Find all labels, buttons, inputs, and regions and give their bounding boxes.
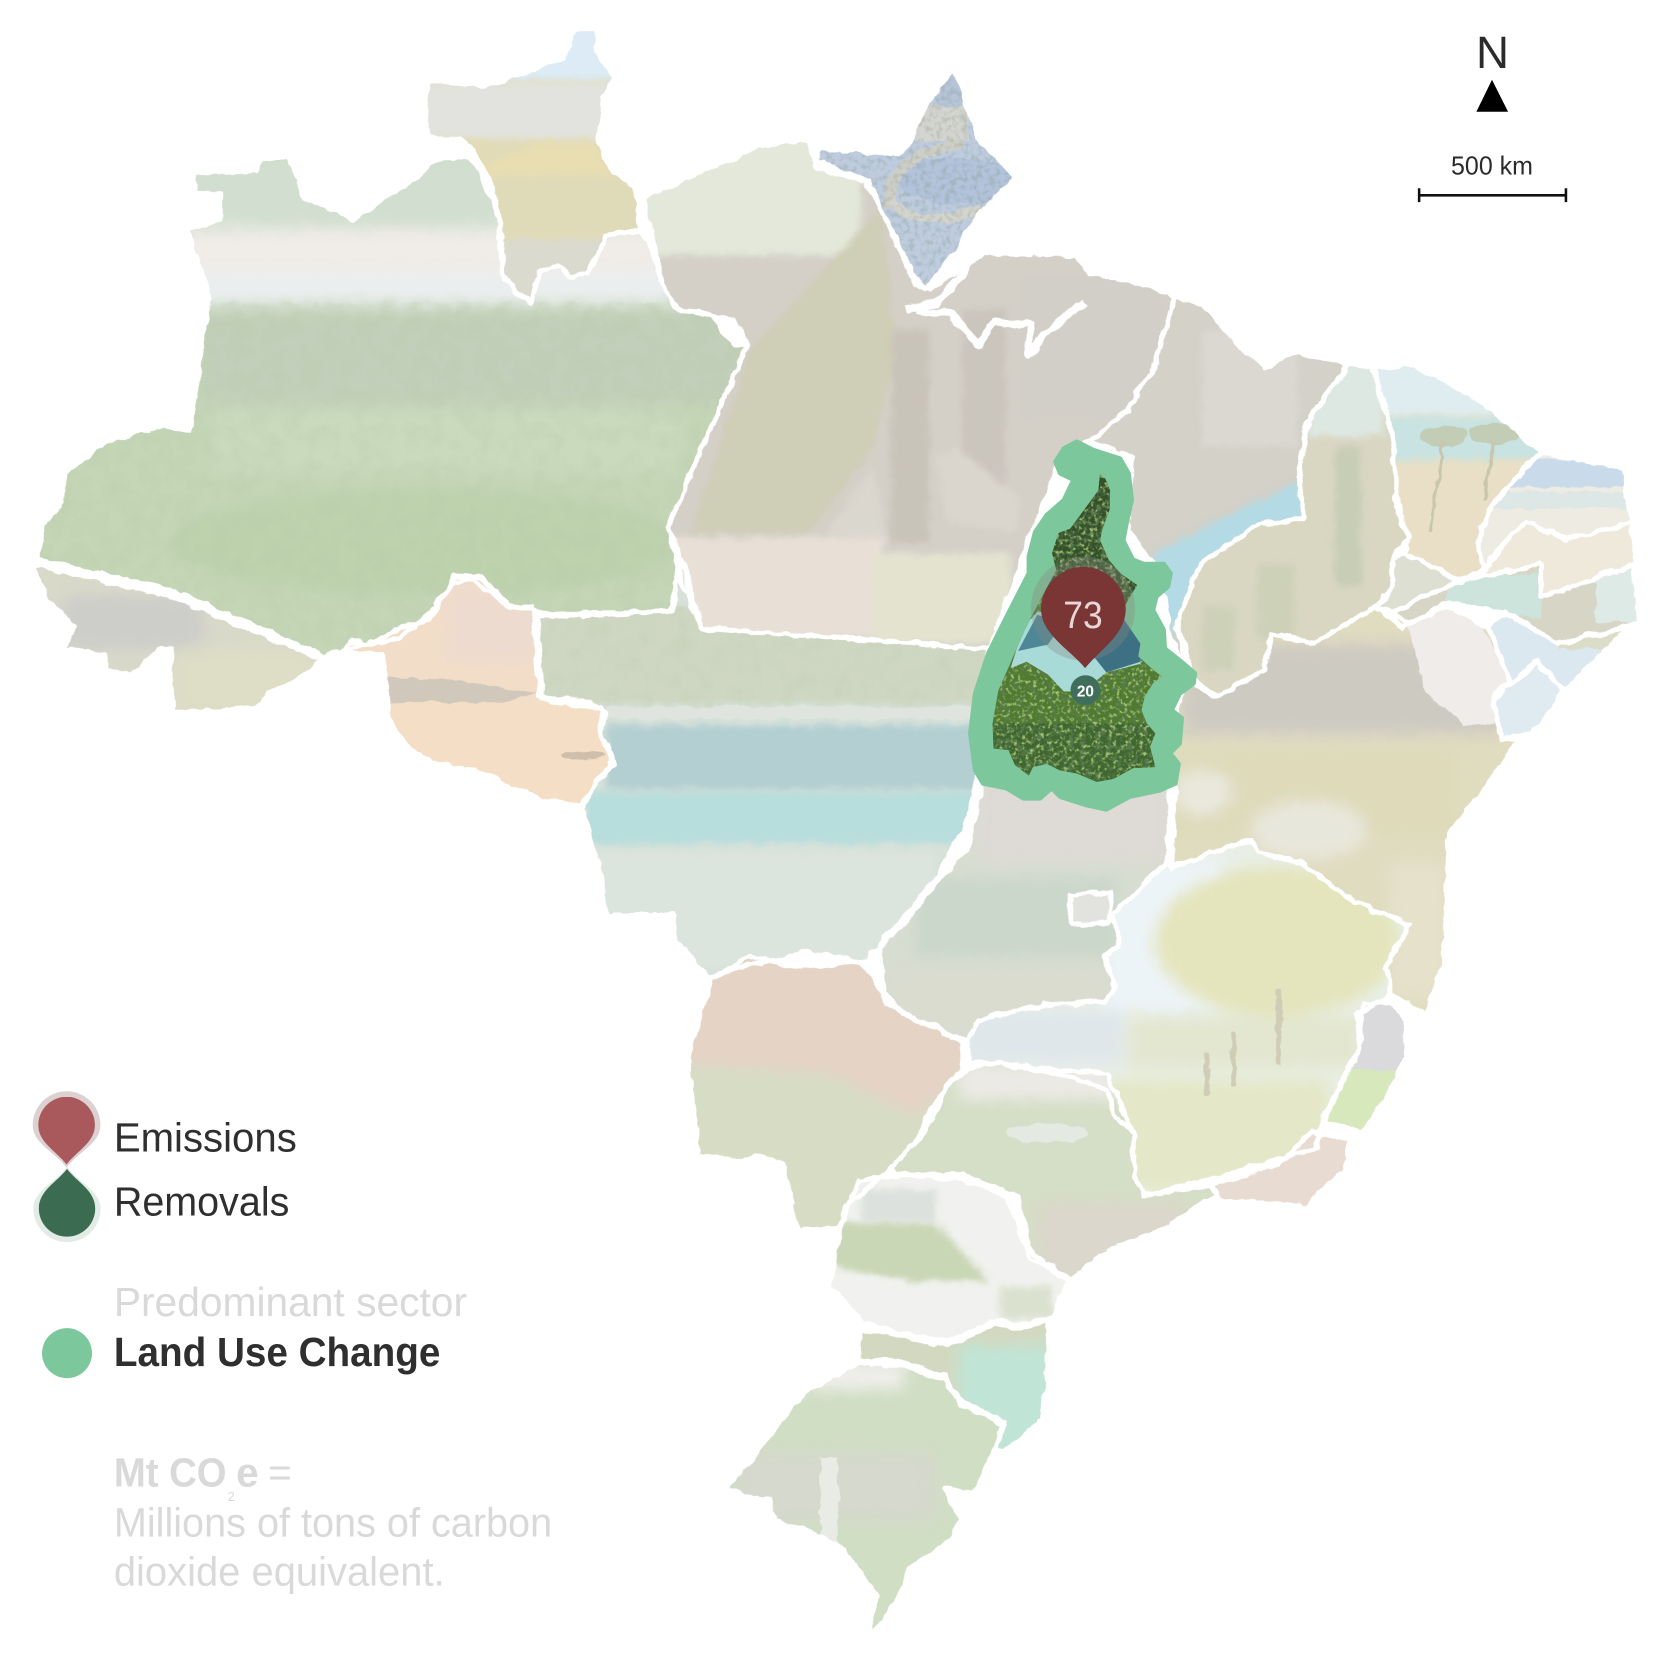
unit note: Mt CO2e: 2 <box>228 1489 235 1504</box>
state: Sergipe, boats photo <box>1496 664 1560 736</box>
emissions pin: 73: 73 <box>1063 594 1103 637</box>
legend heading: Predominant sector: Predominant sector <box>114 1279 467 1325</box>
state: Rondonia, sunset river photo <box>340 577 614 805</box>
state: Ceara, beach palms photo <box>1378 366 1539 578</box>
emissions drop icon <box>33 1091 100 1168</box>
unit note: Mt CO2e: Millions of tons of carbon <box>114 1500 552 1546</box>
unit note: Mt CO2e: Mt CO <box>114 1450 227 1496</box>
state: Goias, waterfall and valley photo <box>879 782 1170 1041</box>
state: Santa Catarina, green lagoon photo <box>858 1320 1053 1457</box>
state: Rio Grande do Norte, coast photo <box>1480 455 1630 564</box>
state: Roraima, tepui photo <box>420 27 644 303</box>
state: Paraiba, sand coast and city photo <box>1380 524 1634 610</box>
state: Rio de Janeiro, bay photo <box>1211 1132 1349 1206</box>
state: Amazonas, forest photo <box>30 154 753 660</box>
emissions pin: 73 <box>1041 567 1126 668</box>
state: Espirito Santo, peak photo <box>1323 1002 1406 1133</box>
Tocantins land use change outline <box>970 441 1195 810</box>
scale bar: 500 km <box>1419 150 1566 202</box>
legend label: Removals: Removals <box>114 1178 289 1224</box>
state: Rio Grande do Sul, canyon photo <box>726 1362 1004 1634</box>
unit note: Mt CO2e: dioxide equivalent. <box>114 1549 445 1595</box>
state: Bahia, flowers and plains photo <box>1165 606 1520 1015</box>
state: Amapa, acai berries photo <box>817 69 1016 289</box>
state: Para, buttress tree photo <box>638 138 1176 651</box>
state: Mato Grosso do Sul, red cliff photo <box>681 952 968 1230</box>
state: Distrito Federal <box>1070 893 1111 924</box>
state: Minas Gerais, tree and grass photo <box>963 839 1410 1196</box>
state: Acre, dusk palms photo <box>30 564 322 713</box>
highlighted state: Tocantins <box>970 441 1195 810</box>
state: Alagoas, shoreline photo <box>1490 617 1622 687</box>
legend: emissions and removals <box>33 1091 297 1242</box>
north arrow <box>1476 27 1509 112</box>
unit note: Mt CO2e: = <box>268 1450 292 1496</box>
legend: predominant sector <box>42 1279 467 1378</box>
legend label: Land Use Change: Land Use Change <box>114 1329 440 1375</box>
unit note: Mt CO2e: e <box>236 1450 259 1496</box>
Tocantins forest and river photo <box>989 473 1165 782</box>
state: Piaui, cactus photo <box>1177 362 1408 697</box>
removals pin: 20: 20 <box>1077 683 1094 700</box>
state: Pernambuco, lagoon photo <box>1387 564 1639 644</box>
state: Sao Paulo, skyline and park photo <box>887 1063 1217 1281</box>
scale bar: 500 km: 500 km <box>1451 150 1533 180</box>
legend label: Emissions: Emissions <box>114 1115 297 1161</box>
land use change colour dot <box>42 1328 92 1378</box>
unit note: Mt CO2e <box>114 1450 552 1595</box>
state: Parana, waterfall photo <box>830 1174 1068 1341</box>
removals drop icon <box>33 1167 101 1242</box>
north arrow: N <box>1476 27 1509 78</box>
emissions pin halo <box>1031 556 1135 661</box>
removals pin: 20 <box>1071 675 1100 705</box>
state: Maranhao, rock and water photo <box>1089 298 1349 676</box>
state: Mato Grosso, crystal water photo <box>532 559 989 979</box>
